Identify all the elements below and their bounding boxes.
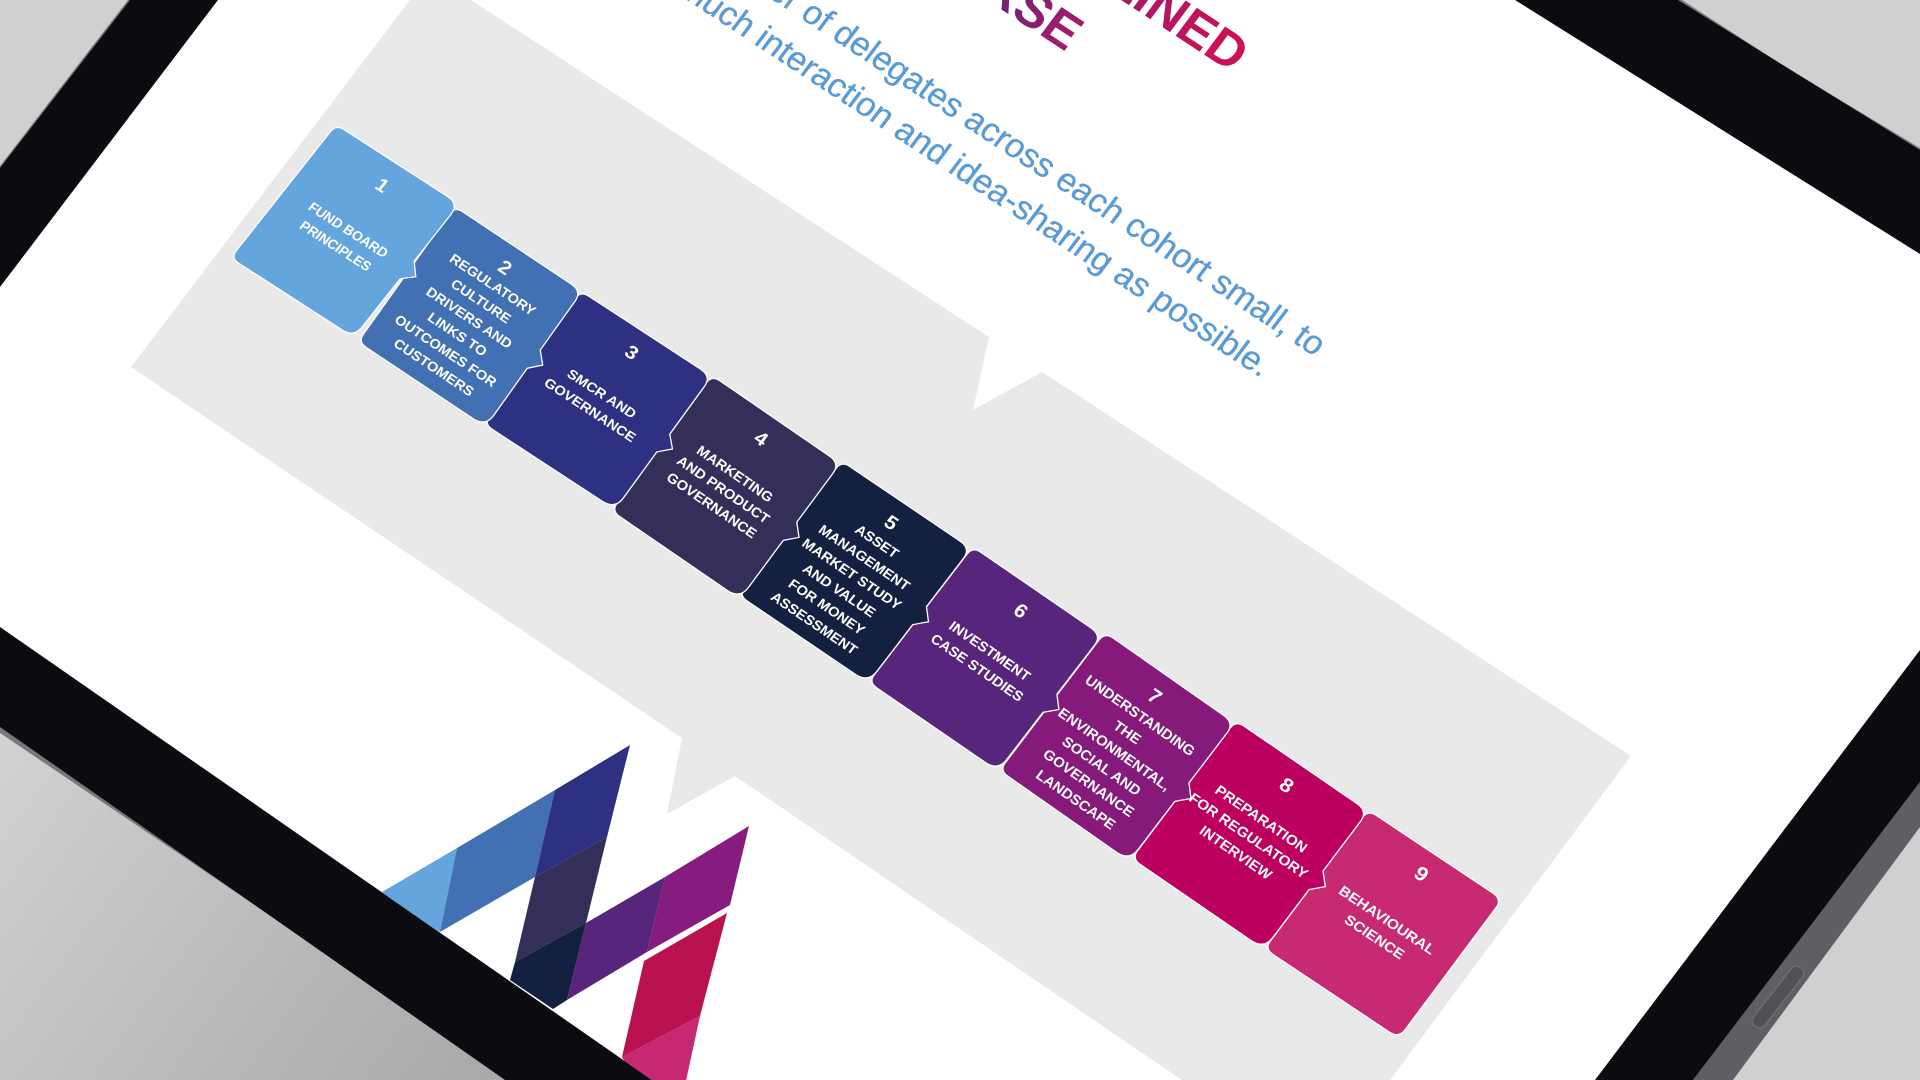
step 4 xyxy=(611,375,849,605)
step 1 xyxy=(231,125,469,343)
step 4: AND PRODUCT xyxy=(673,453,772,527)
step 7 xyxy=(999,632,1244,867)
step 7: THE xyxy=(1110,718,1144,748)
step 3: SMCR AND xyxy=(564,367,639,422)
step 9: 9 xyxy=(1410,862,1433,887)
step 2: CULTURE xyxy=(448,276,514,326)
step 7: SOCIAL AND xyxy=(1059,734,1143,799)
step 6: CASE STUDIES xyxy=(927,631,1026,706)
step 5: MANAGEMENT xyxy=(815,522,913,595)
step 5: ASSET xyxy=(852,522,902,562)
step 5: FOR MONEY xyxy=(785,577,868,639)
step 3: GOVERNANCE xyxy=(541,375,638,446)
step 6 xyxy=(869,547,1111,777)
step 9: BEHAVIOURAL xyxy=(1335,884,1438,958)
step 5: ASSESSMENT xyxy=(767,589,860,658)
step 8: FOR REGULATORY xyxy=(1186,791,1311,882)
step 2: OUTCOMES FOR xyxy=(392,311,500,390)
step 4: GOVERNANCE xyxy=(663,470,759,542)
step 9: SCIENCE xyxy=(1341,913,1407,963)
step 7: 7 xyxy=(1143,684,1166,709)
step 2: LINKS TO xyxy=(425,309,490,359)
step 1: 1 xyxy=(371,175,393,198)
step 1: PRINCIPLES xyxy=(297,218,374,274)
step 5: AND VALUE xyxy=(799,561,878,621)
step 8: PREPARATION xyxy=(1212,783,1310,856)
step 9 xyxy=(1264,810,1502,1038)
step 3: 3 xyxy=(620,341,642,365)
icon: tablet side button xyxy=(1750,964,1806,1030)
step 7: GOVERNANCE xyxy=(1040,747,1137,821)
step 7: UNDERSTANDING xyxy=(1082,673,1198,760)
step 8: 8 xyxy=(1275,774,1298,798)
step 8 xyxy=(1132,720,1377,956)
step 8: INTERVIEW xyxy=(1196,823,1275,883)
step 2: DRIVERS AND xyxy=(423,284,515,352)
step 1: FUND BOARD xyxy=(305,199,391,261)
step 6: 6 xyxy=(1009,600,1032,623)
step 2 xyxy=(358,206,591,433)
step 5: MARKET STUDY xyxy=(799,536,905,614)
step 7: ENVIRONMENTAL, xyxy=(1054,706,1173,794)
step 7: LANDSCAPE xyxy=(1032,768,1118,834)
logo mark xyxy=(382,745,749,1080)
step 2: REGULATORY xyxy=(447,251,539,319)
step 6: INVESTMENT xyxy=(946,619,1033,685)
step 4: 4 xyxy=(750,427,772,451)
panel: grey speech bubble xyxy=(131,0,1631,1080)
panel: module steps xyxy=(231,125,1502,1038)
step 2: 2 xyxy=(494,256,516,280)
step 2: CUSTOMERS xyxy=(391,335,477,399)
step 3 xyxy=(484,291,721,516)
step 5: 5 xyxy=(880,512,902,535)
step 4: MARKETING xyxy=(693,443,776,506)
step 5 xyxy=(739,461,980,689)
